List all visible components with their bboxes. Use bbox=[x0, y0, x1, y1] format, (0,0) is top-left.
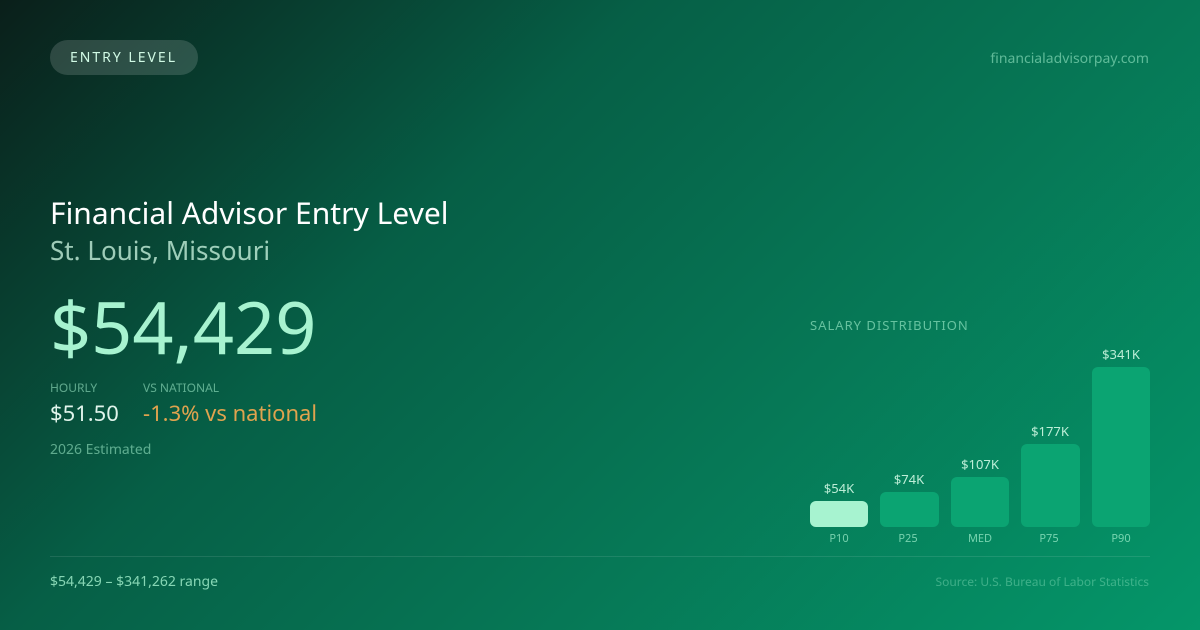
stat: vs national bbox=[143, 379, 317, 428]
axis label: median: MED bbox=[968, 531, 992, 546]
vs national label: VS NATIONAL bbox=[143, 379, 219, 396]
axis label: P75: P75 bbox=[1039, 531, 1059, 546]
estimate note: 2026 Estimated bbox=[50, 440, 151, 459]
hourly label: HOURLY bbox=[50, 379, 97, 396]
title: Financial Advisor Entry Level bbox=[50, 192, 449, 233]
value: P25: $74K bbox=[894, 470, 924, 488]
bar: P10 bbox=[810, 501, 868, 527]
bar: P25 bbox=[880, 492, 939, 527]
site domain: financialadvisorpay.com bbox=[990, 49, 1149, 68]
badge: entry level: ENTRY LEVEL bbox=[70, 48, 177, 67]
location: St. Louis, Missouri bbox=[50, 232, 270, 268]
value: P90: $341K bbox=[1102, 345, 1140, 363]
chart heading: SALARY DISTRIBUTION bbox=[810, 316, 969, 334]
axis label: P10: P10 bbox=[829, 531, 849, 546]
value: median: $107K bbox=[961, 455, 999, 473]
stat: hourly bbox=[50, 379, 119, 428]
hourly value: $51.50 bbox=[50, 398, 119, 428]
vs national value: -1.3% vs national bbox=[143, 398, 317, 428]
value: P75: $177K bbox=[1031, 422, 1069, 440]
bar: P90 bbox=[1092, 367, 1150, 527]
badge: entry level bbox=[50, 40, 198, 75]
bar: P75 bbox=[1021, 444, 1080, 527]
salary figure: $54,429 bbox=[50, 278, 316, 376]
bar: median bbox=[951, 477, 1009, 527]
source note: Source: U.S. Bureau of Labor Statistics bbox=[936, 573, 1149, 590]
salary range: $54,429 – $341,262 range bbox=[50, 572, 218, 591]
axis label: P25: P25 bbox=[898, 531, 918, 546]
value: P10: $54K bbox=[824, 479, 854, 497]
axis label: P90: P90 bbox=[1111, 531, 1131, 546]
